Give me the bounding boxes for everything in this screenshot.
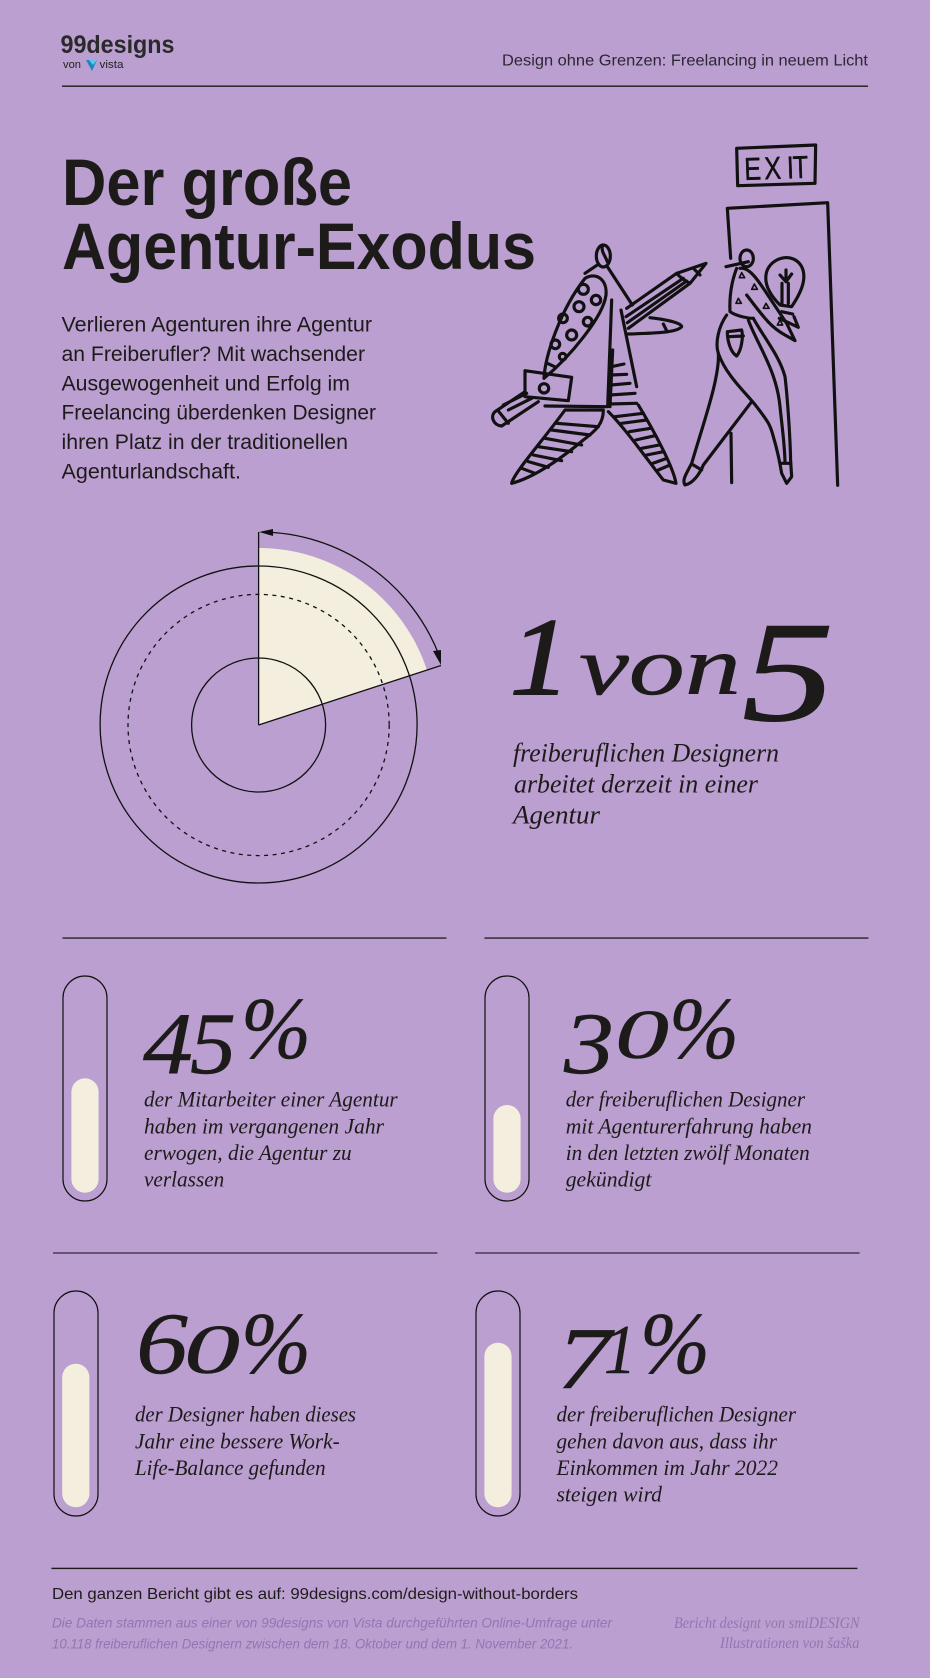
- description: 1 von 5: freiberuflichen Designern: [513, 739, 779, 768]
- door: [727, 203, 838, 485]
- capsule gauge 45%: [63, 976, 107, 1201]
- logo: 99designs by Vista: 99designs: [60, 31, 174, 59]
- title: Agentur-Exodus: [62, 209, 536, 283]
- intro text: Freelancing überdenken Designer: [62, 402, 376, 425]
- footer source note: [52, 1615, 613, 1651]
- figure with light bulb: [684, 250, 804, 485]
- capsule gauge 60%: [54, 1291, 98, 1516]
- text 60%: Life-Balance gefunden: [134, 1455, 326, 1480]
- number 71%: %: [640, 1296, 710, 1393]
- capsule gauge 71%: [476, 1291, 520, 1516]
- text 60%: [134, 1402, 356, 1480]
- number 45%: %: [241, 981, 311, 1078]
- intro text: Agenturlandschaft.: [62, 460, 241, 483]
- number 71%: 7: [557, 1311, 616, 1408]
- number 60%: 0: [184, 1312, 240, 1389]
- text 45%: [144, 1087, 398, 1192]
- figure with pencil: [493, 245, 706, 483]
- text 30%: gekündigt: [566, 1167, 652, 1192]
- text 71%: gehen davon aus, dass ihr: [556, 1428, 777, 1453]
- number 60%: %: [241, 1296, 311, 1393]
- radial chart: 1 in 5: [100, 529, 441, 883]
- text 60%: Jahr eine bessere Work-: [135, 1428, 340, 1453]
- number 45%: 5: [190, 996, 236, 1093]
- footer credits: [674, 1615, 861, 1652]
- big stat: 1 von 5: 5: [742, 593, 834, 751]
- description: 1 von 5: arbeitet derzeit in einer: [514, 770, 759, 799]
- text 30%: in den letzten zwölf Monaten: [566, 1140, 810, 1165]
- arrowheads: [259, 529, 441, 665]
- exit sign: EXIT: [744, 150, 809, 188]
- text 30%: der freiberuflichen Designer: [566, 1087, 805, 1112]
- text 71%: steigen wird: [556, 1482, 663, 1507]
- footer source note: 10.118 freiberuflichen Designern zwischen dem 18. Oktober und dem 1. November 2021.: [52, 1635, 573, 1651]
- number 30%: 3: [563, 996, 614, 1093]
- cream wedge: [259, 548, 427, 725]
- text 30%: mit Agenturerfahrung haben: [566, 1113, 812, 1138]
- footer source note: Die Daten stammen aus einer von 99designs von Vista durchgeführten Online-Umfrage unter: [52, 1615, 613, 1631]
- big stat: 1 von 5: von: [579, 620, 741, 713]
- number 30%: %: [669, 981, 739, 1078]
- number 30%: 0: [615, 997, 669, 1074]
- text 30%: [566, 1087, 812, 1192]
- number 45%: [143, 981, 311, 1093]
- text 71%: der freiberuflichen Designer: [556, 1402, 796, 1427]
- footer credits: Bericht designt von smiDESIGN: [674, 1615, 861, 1632]
- text 71%: [556, 1402, 796, 1507]
- text 45%: erwogen, die Agentur zu: [144, 1140, 352, 1165]
- footer credits: Illustrationen von šaška: [719, 1635, 860, 1652]
- intro text: Ausgewogenheit und Erfolg im: [62, 372, 350, 395]
- big stat: 1 von 5: 1: [510, 596, 570, 718]
- logo: 99designs by Vista: [60, 31, 174, 71]
- intro text: Verlieren Agenturen ihre Agentur: [62, 314, 372, 336]
- illustration: two figures walking to exit door: [493, 145, 838, 485]
- panel: 71%: [476, 1291, 796, 1516]
- text 71%: Einkommen im Jahr 2022: [556, 1455, 778, 1480]
- panel: 60%: [54, 1291, 356, 1516]
- title: Der große: [62, 145, 352, 219]
- logo: 99designs by Vista: vista: [100, 59, 124, 71]
- capsule gauge 30%: [485, 976, 529, 1201]
- description: 1 von 5: [511, 739, 779, 829]
- panel: 45%: [63, 976, 398, 1201]
- number 71%: 1: [604, 1312, 636, 1389]
- number 30%: [563, 981, 739, 1093]
- description: 1 von 5: Agentur: [511, 800, 601, 829]
- logo: 99designs by Vista: von: [63, 59, 81, 71]
- intro text: [62, 314, 376, 483]
- big stat: 1 von 5: [510, 593, 834, 751]
- intro text: ihren Platz in der traditionellen: [62, 431, 348, 454]
- text 45%: der Mitarbeiter einer Agentur: [144, 1087, 398, 1112]
- text 60%: der Designer haben dieses: [135, 1402, 356, 1427]
- number 45%: 4: [143, 996, 193, 1093]
- number 71%: [557, 1296, 710, 1408]
- number 60%: 6: [136, 1296, 188, 1393]
- text 45%: haben im vergangenen Jahr: [144, 1113, 384, 1138]
- panel: 30%: [485, 976, 812, 1201]
- footer link line: Den ganzen Bericht gibt es auf: 99designs.com/design-without-borders: [52, 1586, 578, 1603]
- intro text: an Freiberufler? Mit wachsender: [62, 343, 365, 366]
- number 60%: [136, 1296, 311, 1393]
- text 45%: verlassen: [144, 1167, 224, 1192]
- title: [62, 145, 536, 283]
- header subtitle: Design ohne Grenzen: Freelancing in neuem Licht: [502, 52, 869, 70]
